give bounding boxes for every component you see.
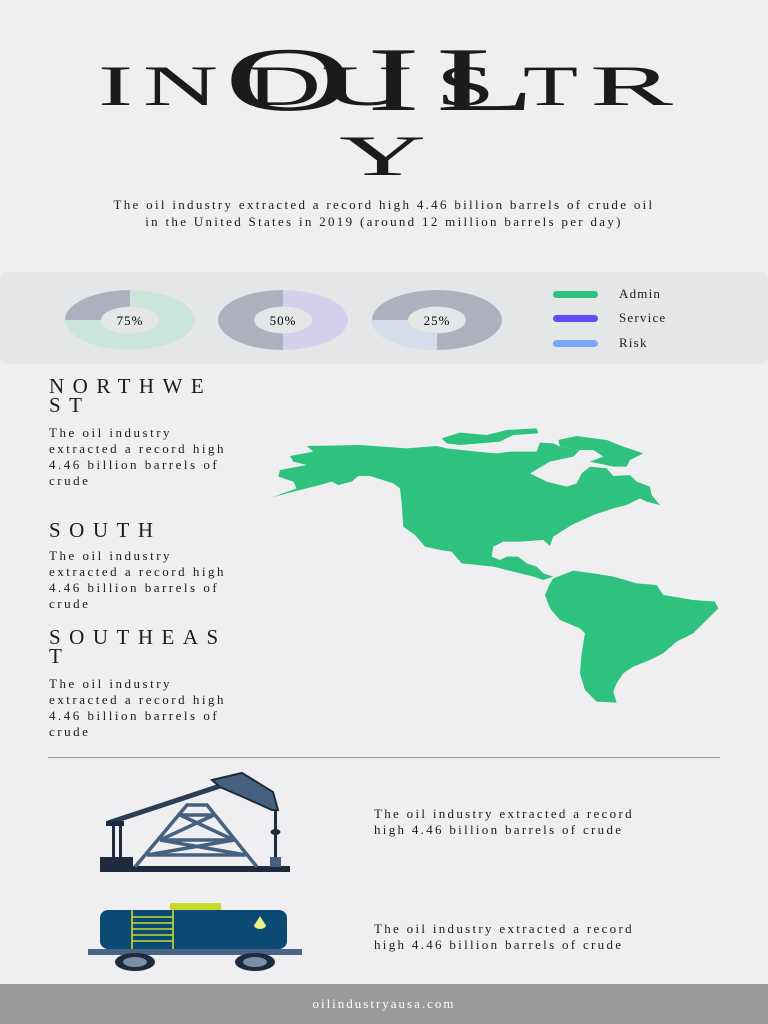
region: southeast: crude: [49, 724, 90, 739]
region: southeast: [49, 625, 227, 739]
legend: [553, 286, 666, 350]
title: N: [143, 55, 218, 118]
title: U: [321, 55, 412, 118]
text block: tanker: [374, 921, 634, 952]
donut 25%: [372, 298, 484, 350]
legend: Admin: [619, 286, 661, 301]
footer: [0, 984, 768, 1024]
region: southeast: 4.46 billion barrels of: [49, 708, 219, 723]
donut 25%: 25%: [424, 313, 450, 328]
title: S: [436, 55, 495, 118]
map: americas: [272, 428, 718, 703]
region: southeast: The oil industry: [49, 676, 172, 691]
region: south: [49, 518, 226, 611]
icon: tanker wagon: [88, 903, 302, 971]
donut 50%: 50%: [270, 313, 296, 328]
title: I: [98, 55, 133, 118]
subtitle: The oil industry extracted a record high 4.46 billion barrels of crude oil: [114, 197, 654, 212]
text block: pump: high 4.46 billion barrels of crude: [374, 822, 623, 837]
region: south: 4.46 billion barrels of: [49, 580, 219, 595]
region: northwest: The oil industry: [49, 425, 172, 440]
region: south: crude: [49, 596, 90, 611]
region: northwest: crude: [49, 473, 90, 488]
region: south: The oil industry: [49, 548, 172, 563]
subtitle: in the United States in 2019 (around 12 million barrels per day): [145, 214, 623, 229]
donut 50%: [218, 290, 330, 350]
icon: pump jack: [100, 772, 290, 872]
legend: Service: [619, 310, 666, 325]
region: northwest: 4.46 billion barrels of: [49, 457, 219, 472]
subtitle: [114, 197, 654, 229]
title: L: [436, 30, 535, 130]
text block: tanker: high 4.46 billion barrels of crude: [374, 937, 623, 952]
text block: pump: [374, 806, 634, 837]
title: O: [224, 30, 353, 130]
donut 75%: 75%: [117, 313, 143, 328]
region: southeast: SOUTHEAS: [49, 625, 227, 649]
region: south: SOUTH: [49, 518, 162, 542]
region: northwest: ST: [49, 393, 91, 417]
title: R: [590, 55, 673, 118]
legend: Risk: [619, 335, 648, 350]
region: northwest: [49, 374, 226, 488]
title: Y: [339, 125, 426, 188]
text block: pump: The oil industry extracted a record: [374, 806, 634, 821]
text block: tanker: The oil industry extracted a record: [374, 921, 634, 936]
title: [98, 30, 673, 188]
panel: donut charts: [0, 272, 768, 364]
title: T: [523, 55, 578, 118]
region: southeast: extracted a record high: [49, 692, 226, 707]
title: I: [367, 30, 420, 130]
donut 75%: [65, 290, 177, 342]
title: D: [246, 55, 321, 118]
region: northwest: extracted a record high: [49, 441, 226, 456]
region: southeast: T: [49, 644, 70, 668]
region: northwest: NORTHWE: [49, 374, 212, 398]
footer: oilindustryausa.com: [312, 996, 456, 1011]
region: south: extracted a record high: [49, 564, 226, 579]
